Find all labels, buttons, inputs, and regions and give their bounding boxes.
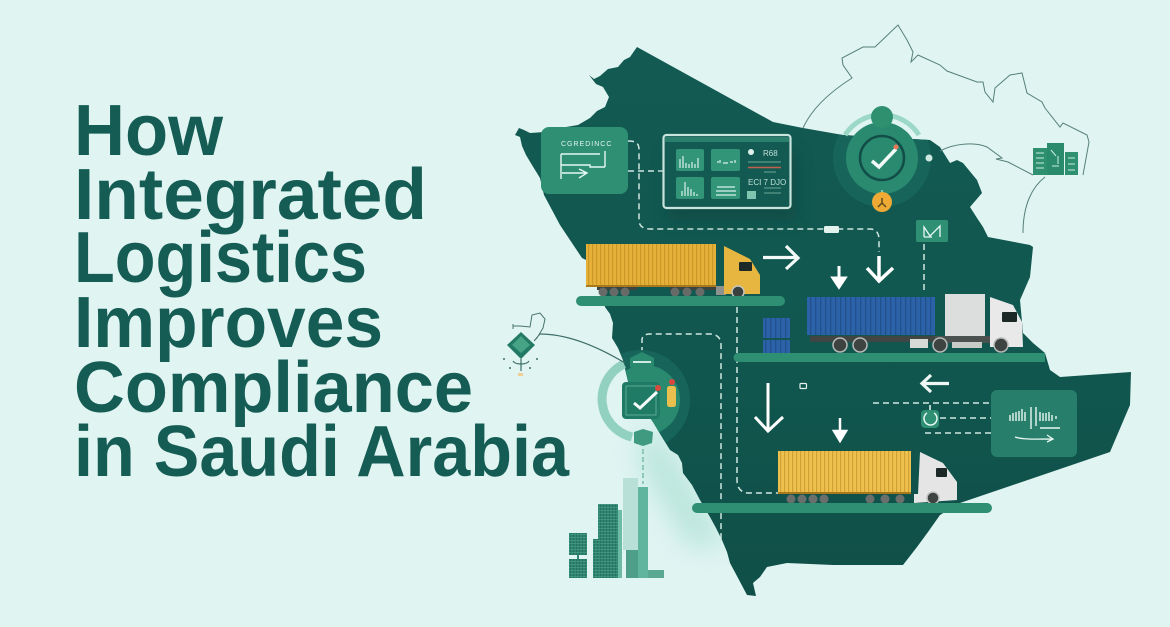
glow behind map edge bbox=[640, 420, 725, 545]
title bbox=[74, 91, 570, 492]
icon: compliance badge lower bbox=[590, 350, 690, 484]
icon: compliance badge top bbox=[833, 106, 932, 212]
tag on route bbox=[824, 226, 839, 233]
platform 2 bbox=[734, 353, 1045, 362]
panel: waveform card bbox=[991, 390, 1077, 457]
arrow down large lower bbox=[755, 383, 783, 431]
icon: chart box M bbox=[916, 220, 948, 242]
platform 3 bbox=[692, 503, 992, 513]
icon: loop badge bbox=[921, 405, 939, 428]
panel: dashboard bbox=[664, 135, 796, 220]
arrow right bbox=[763, 246, 798, 269]
icon: city skyline bbox=[569, 478, 664, 578]
outline map top right bbox=[803, 25, 1089, 233]
icon: city blocks top right bbox=[1033, 143, 1078, 175]
arrow down small bbox=[833, 266, 845, 287]
dashboard labels: R68 bbox=[763, 149, 778, 158]
chart tiles bbox=[676, 149, 740, 199]
arrow down small lower bbox=[834, 418, 846, 441]
title: Logistics bbox=[74, 218, 367, 298]
title: How bbox=[74, 91, 224, 171]
truck: yellow bbox=[586, 244, 760, 298]
panel: compliance card bbox=[541, 127, 628, 194]
small window icon bbox=[800, 384, 806, 388]
truck: yellow and white bbox=[778, 451, 957, 504]
title: Improves bbox=[74, 283, 383, 363]
icon: small map and diamond node bbox=[503, 313, 625, 376]
title: Integrated bbox=[74, 155, 427, 235]
panel: dashboard: ECI 7 DJO bbox=[748, 178, 786, 187]
panel: compliance card: CGREDINCC bbox=[561, 141, 612, 148]
arrow down large bbox=[867, 256, 893, 282]
platform 1 bbox=[576, 296, 785, 306]
title: in Saudi Arabia bbox=[74, 412, 570, 492]
small blue container bbox=[763, 318, 790, 353]
arrow left bbox=[922, 375, 949, 392]
map of Saudi Arabia bbox=[515, 47, 1131, 596]
dashed route lines bbox=[628, 141, 991, 540]
title: Compliance bbox=[74, 348, 473, 428]
truck: blue and white bbox=[807, 294, 1023, 352]
